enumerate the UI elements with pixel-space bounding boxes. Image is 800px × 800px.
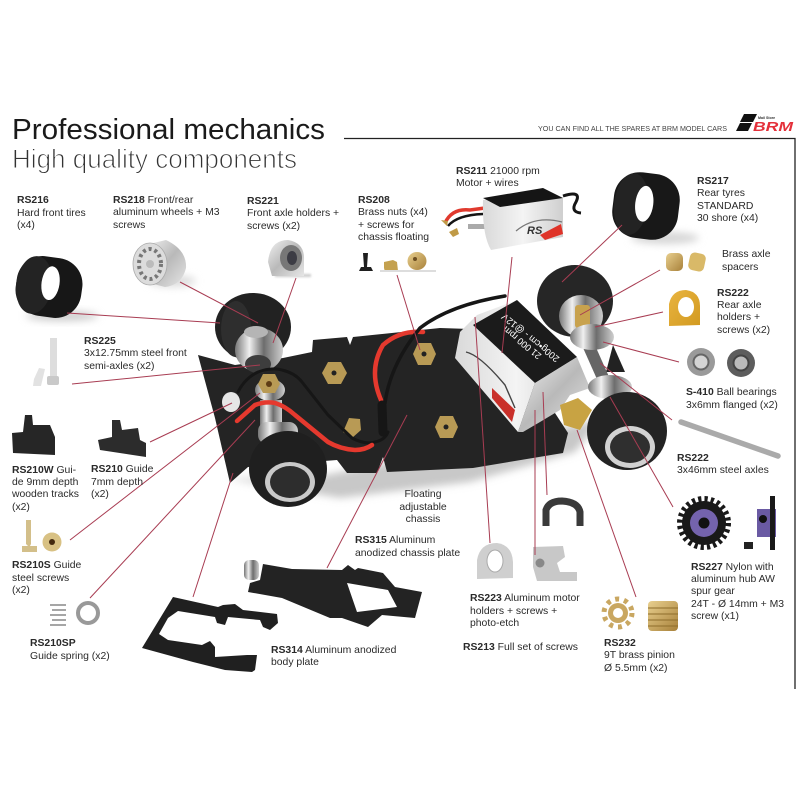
label: RS232: Ø 5.5mm (x2) (604, 663, 668, 674)
label: floating adjustable chassis: chassis (406, 514, 440, 525)
label: RS232: RS232 (604, 638, 636, 649)
label: RS227: spur gear (691, 586, 735, 597)
label: RS210W: RS210W Gui- (12, 465, 76, 476)
label: RS210S: RS210S Guide (12, 560, 81, 571)
label: RS208: RS208 (358, 195, 390, 206)
label: RS216: RS216 (17, 195, 49, 206)
label: RS218: aluminum wheels + M3 (113, 207, 220, 218)
label: RS210SP: Guide spring (x2) (30, 651, 110, 662)
label: S-410: 3x6mm flanged (x2) (686, 400, 778, 411)
heading: professional mechanics: Professional mechanics (12, 114, 325, 146)
part: RS227 spur gear (680, 496, 776, 550)
part: RS222 gold rear axle holder (669, 290, 700, 326)
rear far wheel (537, 265, 613, 337)
chassis plate (198, 328, 568, 483)
label: RS217: RS217 (697, 176, 729, 187)
label: RS222 axles: 3x46mm steel axles (677, 465, 769, 476)
label: RS210S: (x2) (12, 585, 30, 596)
label: RS217: Rear tyres (697, 188, 745, 199)
part: photo-etch plate (546, 501, 580, 526)
label: RS315: anodized chassis plate (355, 548, 460, 559)
part: RS217 rear tyre (609, 169, 699, 244)
label: RS225: RS225 (84, 336, 116, 347)
front far wheel (215, 293, 291, 373)
label: brass axle spacers: spacers (722, 262, 758, 273)
label: RS210W: de 9mm depth (12, 477, 79, 488)
label: RS223: photo-etch (470, 618, 519, 629)
label: RS223: holders + screws + (470, 606, 557, 617)
label: RS211: RS211 21000 rpm (456, 166, 540, 177)
leader lines (67, 225, 679, 598)
part: RS210W guide (12, 415, 55, 455)
rear chassis tip (606, 345, 625, 372)
label: floating adjustable chassis: Floating (405, 489, 441, 500)
label: RS222 holders: holders + (717, 312, 760, 323)
label: RS216: Hard front tires (17, 208, 86, 219)
part: RS210 guide (98, 420, 146, 457)
frame line (344, 138, 795, 689)
part: RS216 front tire (12, 253, 98, 321)
label: RS217: STANDARD (697, 201, 753, 212)
part: RS210SP guide spring (50, 603, 98, 625)
label: RS222 axles: RS222 (677, 453, 709, 464)
label: RS210: 7mm depth (91, 477, 143, 488)
part: RS208 screw and nuts (359, 252, 436, 272)
label: RS218: screws (113, 220, 145, 231)
pinion on motor (560, 398, 592, 430)
rear near wheel (587, 392, 667, 470)
label: RS210W: wooden tracks (11, 489, 79, 500)
motor label 2: 200g•cm - @12V (499, 310, 562, 364)
part: RS314 body plate (142, 597, 278, 672)
label: RS223: RS223 Aluminum motor (470, 593, 580, 604)
label: RS221: Front axle holders + (247, 208, 339, 219)
label: RS227: RS227 Nylon with (691, 562, 774, 573)
label: RS314: body plate (271, 657, 319, 668)
part: brass axle spacers (666, 252, 707, 272)
label: RS227: 24T - Ø 14mm + M3 (691, 599, 784, 610)
label: RS208: Brass nuts (x4) (358, 207, 428, 218)
label: RS210W: (x2) (12, 502, 30, 513)
label: RS210: RS210 Guide (91, 464, 153, 475)
logo: BRM: Mail Store (758, 116, 775, 120)
logo: BRM: BRM (753, 120, 794, 134)
label: RS217: 30 shore (x4) (697, 213, 758, 224)
car shadow (225, 420, 600, 498)
brass nuts (258, 343, 458, 438)
label: RS232: 9T brass pinion (604, 650, 675, 661)
part: RS232 pinions (604, 599, 678, 631)
wires (237, 296, 505, 450)
part: RS225 semi-axles (33, 338, 59, 386)
part: RS218 aluminum wheel (133, 240, 196, 287)
label: RS222 holders: RS222 (717, 288, 749, 299)
part: RS223 motor holder slotted (533, 546, 577, 581)
label: RS315: RS315 Aluminum (355, 535, 435, 546)
front axle silver (222, 379, 285, 428)
label: RS208: chassis floating (358, 232, 429, 243)
rear axle and bearings (570, 324, 632, 399)
label: RS225: semi-axles (x2) (84, 361, 154, 372)
part: S-410 ball bearings (687, 348, 755, 377)
part: RS315 chassis plate (244, 560, 422, 627)
part: RS211 motor and wires: RS (527, 225, 543, 237)
header note: YOU CAN FIND ALL THE SPARES AT BRM MODEL CARS (538, 124, 727, 133)
part: RS222 steel axle (681, 422, 778, 456)
label: S-410: S-410 Ball bearings (686, 387, 777, 398)
part: RS223 motor holder (477, 543, 513, 579)
label: RS218: RS218 Front/rear (113, 195, 193, 206)
label: RS227: aluminum hub AW (691, 574, 775, 585)
label: brass axle spacers: Brass axle (722, 249, 771, 260)
logo: BRM (736, 114, 794, 134)
front near wheel (249, 422, 327, 507)
label: RS314: RS314 Aluminum anodized (271, 645, 396, 656)
label: RS210S: steel screws (12, 573, 69, 584)
label: RS210SP: RS210SP (30, 638, 76, 649)
subheading: high quality components: High quality components (12, 144, 297, 174)
label: RS211: Motor + wires (456, 178, 519, 189)
label: RS210: (x2) (91, 489, 109, 500)
label: RS213: RS213 Full set of screws (463, 642, 578, 653)
motor label 1: 21 000 rpm (501, 323, 544, 361)
car assembly (198, 265, 667, 507)
label: floating adjustable chassis: adjustable (399, 502, 447, 513)
part: RS211 motor and wires (441, 188, 581, 250)
label: RS222 holders: screws (x2) (717, 325, 770, 336)
label: RS208: + screws for (358, 220, 415, 231)
label: RS221: screws (x2) (247, 221, 300, 232)
part: RS210S guide screws (22, 520, 62, 552)
label: RS225: 3x12.75mm steel front (84, 348, 187, 359)
label: RS221: RS221 (247, 196, 279, 207)
label: RS216: (x4) (17, 220, 35, 231)
motor (455, 300, 590, 432)
part: RS221 front axle holder (268, 240, 311, 277)
label: RS227: screw (x1) (691, 611, 739, 622)
title (12, 114, 325, 174)
label: RS222 holders: Rear axle (717, 300, 762, 311)
